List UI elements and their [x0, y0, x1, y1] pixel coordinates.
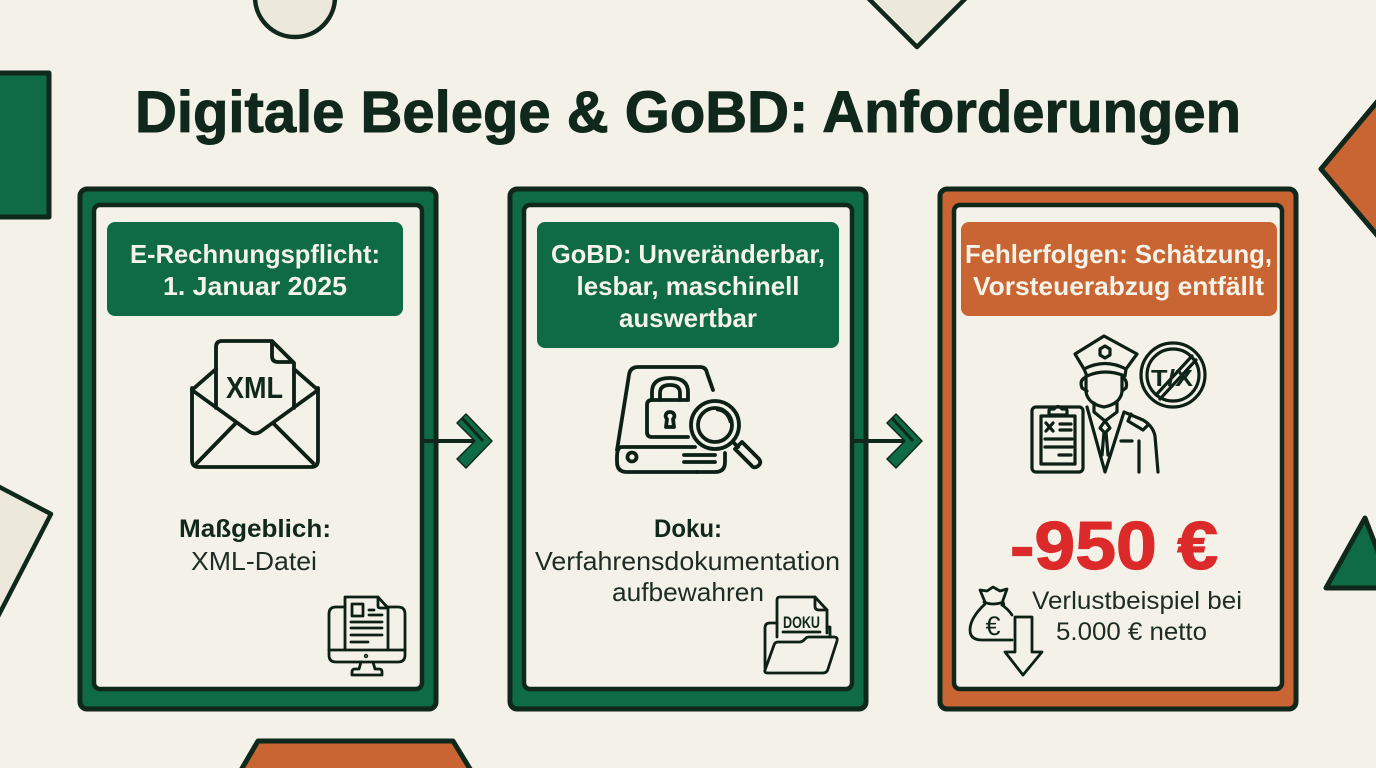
arrow: panel 2 to panel 3 — [853, 414, 922, 468]
panel: Fehlerfolgen — [940, 189, 1296, 709]
icon: tax officer with clipboard — [1032, 336, 1205, 472]
panel: E-Rechnungspflicht — [80, 189, 436, 709]
big number: loss: -950 € — [1010, 508, 1218, 584]
panel 1 heading: E-Rechnungspflicht: — [130, 239, 380, 269]
text: Doku: Doku: — [654, 515, 722, 543]
text: Maßgeblich — [179, 515, 331, 576]
text: Doku — [535, 515, 840, 607]
text: loss example: 5.000 € netto — [1056, 618, 1207, 646]
icon: locked drive with magnifier — [617, 367, 760, 472]
panel 1 heading — [107, 222, 403, 316]
icon: XML document in envelope: XML — [226, 370, 283, 405]
icon: money bag with down arrow: € — [985, 611, 1001, 641]
icon: DOKU folder — [765, 597, 837, 673]
icon: tax officer with clipboard: T/X — [1151, 365, 1194, 391]
text: Doku: Verfahrensdokumentation — [535, 546, 840, 576]
text: loss example: Verlustbeispiel bei — [1032, 587, 1242, 615]
panel 3 heading: Vorsteuerabzug entfällt — [973, 271, 1264, 301]
title: Digitale Belege & GoBD: Anforderungen — [135, 80, 1241, 145]
icon: money bag with down arrow — [970, 587, 1042, 675]
panel 2 heading: lesbar, maschinell — [576, 271, 800, 301]
arrow: panel 1 to panel 2 — [423, 414, 492, 468]
text: loss example — [1032, 587, 1242, 646]
panel 3 heading: Fehlerfolgen: Schätzung, — [965, 239, 1272, 269]
panel 1 heading: 1. Januar 2025 — [163, 271, 347, 301]
text: Maßgeblich: Maßgeblich: — [179, 515, 331, 543]
icon: DOKU folder: DOKU — [783, 613, 820, 632]
panel 2 heading: auswertbar — [619, 303, 757, 333]
text: Doku: aufbewahren — [612, 577, 764, 607]
panel 2 heading: GoBD: Unveränderbar, — [551, 239, 825, 269]
icon: document on monitor — [329, 597, 405, 675]
panel 2 heading — [537, 222, 839, 348]
text: Maßgeblich: XML-Datei — [191, 546, 317, 576]
panel 3 heading — [961, 222, 1277, 316]
panel: GoBD — [510, 189, 866, 709]
icon: XML document in envelope — [192, 341, 318, 467]
